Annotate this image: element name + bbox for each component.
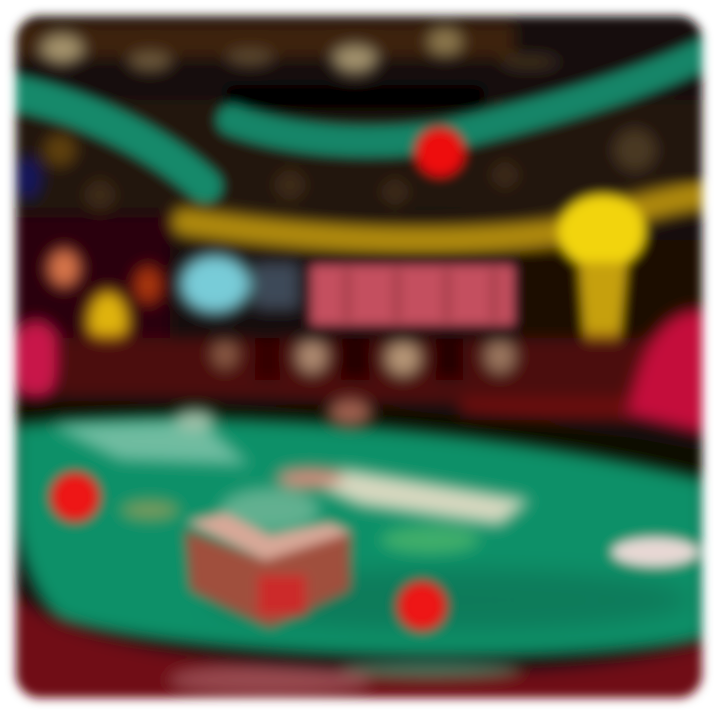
gold banner	[185, 195, 705, 240]
red seats row	[60, 338, 660, 420]
blue screen	[179, 254, 300, 314]
red marker: left	[50, 472, 100, 522]
wall lights	[14, 128, 657, 211]
green awnings	[10, 50, 712, 186]
pink chair right	[625, 310, 710, 435]
ceiling lights	[15, 22, 560, 111]
chips right	[611, 537, 699, 567]
red marker: bottom	[397, 581, 447, 631]
green table	[15, 398, 705, 656]
dice stack	[185, 512, 352, 628]
white table markings	[50, 398, 530, 554]
dark table rail	[10, 399, 710, 490]
pink display panel	[310, 264, 515, 326]
left side lights	[8, 248, 163, 400]
red marker: top	[415, 127, 465, 177]
dark red table edge	[10, 590, 710, 710]
golden trophy	[558, 194, 646, 348]
